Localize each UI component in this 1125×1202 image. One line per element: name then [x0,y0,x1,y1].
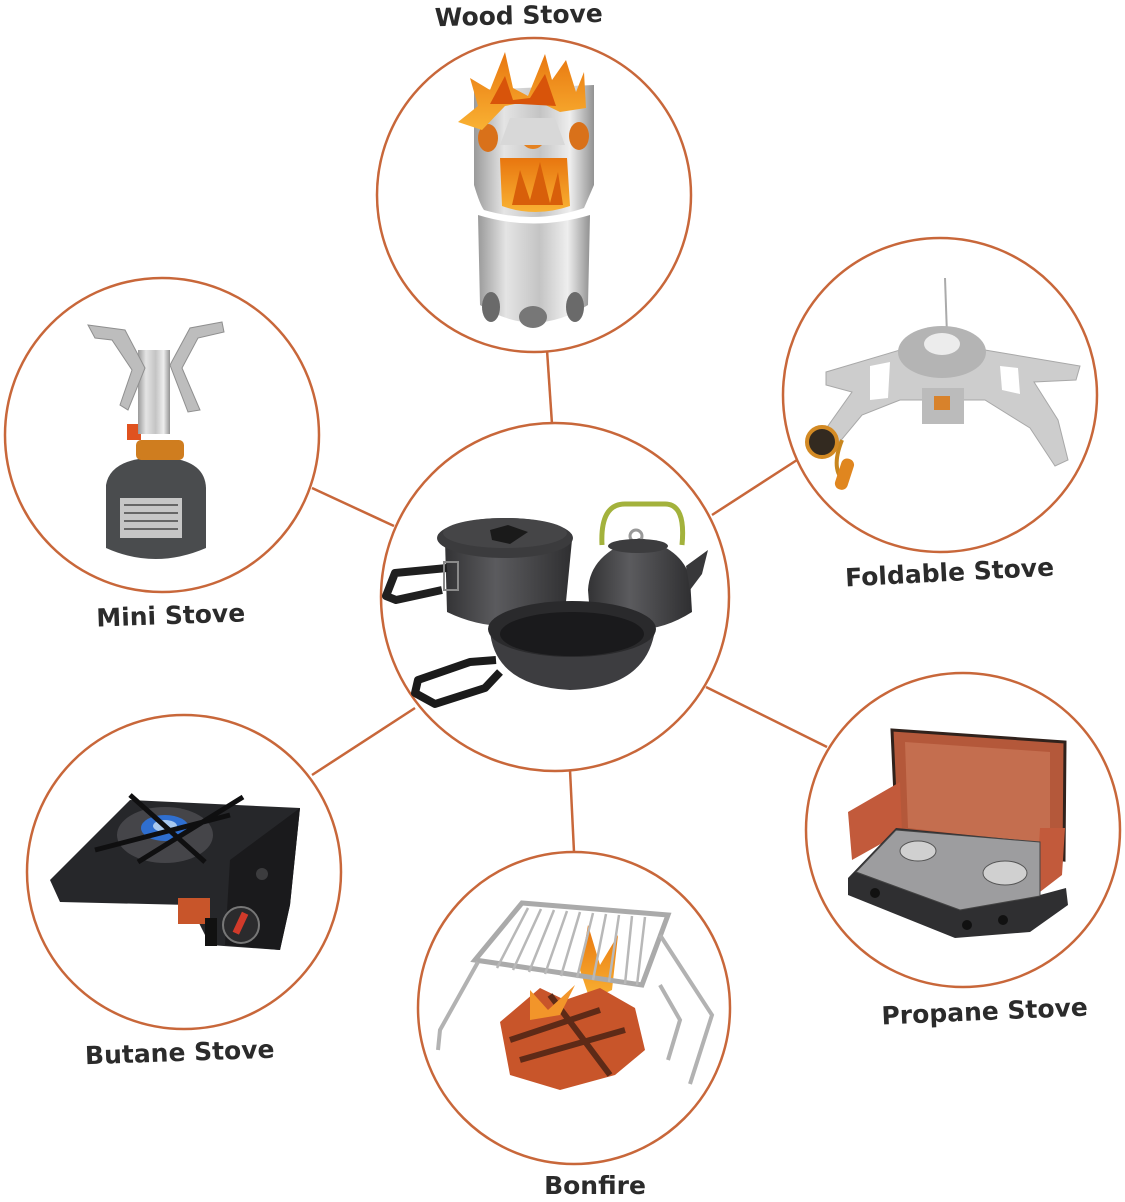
icon: butane stove [50,795,300,950]
icon: propane stove [848,730,1068,938]
panel: butane stove [27,715,341,1029]
heading: Mini Stove: Mini Stove [96,598,246,633]
panel: bonfire [418,852,730,1164]
icon: kettle [588,504,708,629]
connector lines [312,350,827,852]
icon: wood stove [458,52,594,328]
panel: cookware centre [381,423,729,771]
panel: foldable stove [783,238,1097,552]
icon: pot with lid [386,518,573,626]
panel: mini stove [5,278,319,592]
heading: Foldable Stove: Foldable Stove [844,553,1055,592]
panel: wood stove [377,38,691,352]
heading: Butane Stove: Butane Stove [84,1035,275,1070]
heading: Propane Stove: Propane Stove [881,993,1088,1030]
icon: foldable stove [807,278,1080,491]
icon: mini stove [88,322,224,559]
heading: Bonfire: Bonfire [544,1171,646,1200]
icon: frying pan [415,601,656,704]
panel: propane stove [806,673,1120,987]
icon: bonfire grill [438,903,712,1090]
